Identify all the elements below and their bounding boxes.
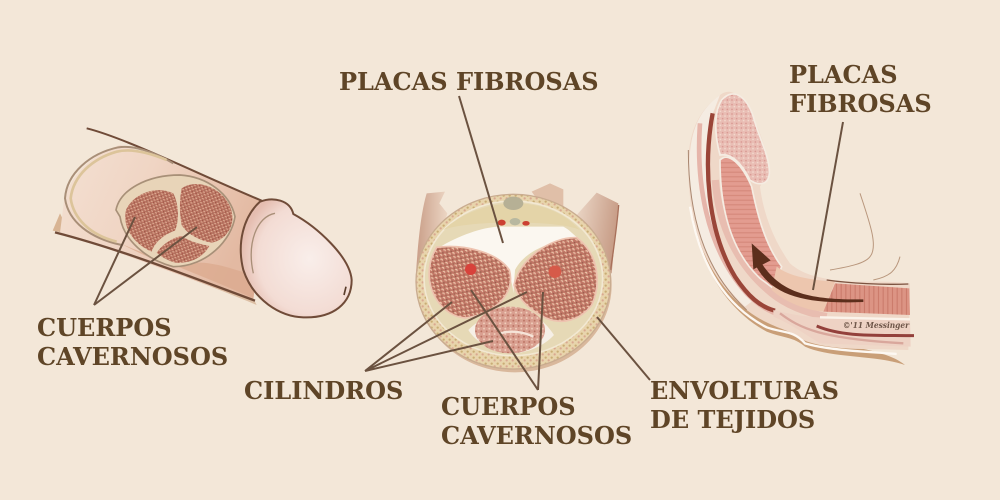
label: placas fibrosas right: PLACAS bbox=[789, 60, 898, 89]
left side tissue bbox=[416, 192, 447, 273]
arrow head bbox=[752, 243, 771, 269]
cross section sheath bbox=[116, 175, 235, 267]
dark outer contour bbox=[688, 150, 747, 310]
label: cuerpos cavernosos center: CAVERNOSOS bbox=[441, 421, 632, 450]
bottom tan shadow bbox=[692, 213, 905, 365]
label: placas fibrosas center: PLACAS FIBROSAS bbox=[339, 67, 599, 96]
red vessel right bbox=[522, 221, 530, 226]
lower red band bbox=[817, 326, 914, 336]
base muscle bbox=[823, 283, 910, 315]
pink top of wrap bbox=[443, 203, 580, 230]
lower white space bbox=[468, 307, 554, 353]
glans section bbox=[716, 94, 769, 184]
bottom shadow bbox=[418, 198, 612, 372]
opening bbox=[344, 287, 346, 295]
fibrous plaque bbox=[772, 267, 835, 312]
label: placas fibrosas right bbox=[789, 60, 932, 118]
label: cuerpos cavernosos left: CUERPOS bbox=[37, 313, 172, 342]
outer pale skin bbox=[689, 95, 752, 307]
stripe in lower layer bbox=[780, 313, 903, 343]
left cylinder bbox=[125, 190, 178, 252]
illustration: side view with cross section bbox=[53, 128, 352, 317]
right artery bbox=[549, 265, 561, 278]
glans highlight bbox=[251, 213, 275, 273]
second layer bbox=[715, 180, 827, 317]
label: cuerpos cavernosos center: CUERPOS bbox=[441, 392, 576, 421]
label: cilindros: CILINDROS bbox=[244, 376, 403, 405]
lower body bbox=[475, 307, 545, 353]
illustration: lengthwise section bbox=[688, 92, 914, 365]
outer body bbox=[688, 92, 910, 350]
leader lines: cilindros bbox=[365, 292, 527, 371]
right side tissue bbox=[577, 193, 618, 273]
label: envolturas de tejidos bbox=[650, 376, 839, 434]
leader line: placas fibrosas right bbox=[813, 122, 843, 290]
inner wrap ring bbox=[424, 201, 603, 356]
leader lines: left cuerpos cavernosos bbox=[94, 217, 197, 305]
lower skin line bbox=[55, 232, 255, 301]
cut edge of skin bbox=[65, 147, 173, 245]
left artery bbox=[465, 264, 476, 275]
left cylinder bbox=[429, 247, 511, 318]
right tissue line bbox=[611, 205, 619, 270]
bottom body bbox=[157, 236, 209, 263]
arrow bbox=[756, 262, 863, 302]
red vessel left bbox=[498, 220, 506, 226]
leader lines: center cuerpos cavernosos bbox=[471, 290, 543, 390]
label: envolturas de tejidos: ENVOLTURAS bbox=[650, 376, 839, 405]
ground shadow under shaft bbox=[53, 213, 70, 234]
top edge bbox=[827, 280, 908, 284]
glans bbox=[241, 199, 352, 317]
label: cuerpos cavernosos center bbox=[441, 392, 632, 450]
vessel mid bbox=[510, 218, 520, 225]
label: cuerpos cavernosos left: CAVERNOSOS bbox=[37, 342, 228, 371]
right cylinder bbox=[180, 184, 232, 243]
corpus section bbox=[720, 157, 782, 288]
signature: ©'11 Messinger bbox=[843, 320, 910, 330]
outer wrap bbox=[416, 194, 611, 369]
mottled skin layer bbox=[699, 123, 780, 315]
leader line: envolturas bbox=[597, 317, 650, 380]
lower white band bbox=[820, 317, 910, 319]
top vessels bbox=[503, 197, 523, 210]
illustration: cross section bbox=[416, 183, 619, 372]
upper skin line bbox=[87, 128, 262, 201]
lower shaft shading bbox=[120, 243, 257, 298]
top tissue bbox=[532, 183, 563, 207]
dark tissue band bbox=[708, 113, 775, 311]
label: envolturas de tejidos: DE TEJIDOS bbox=[650, 405, 815, 434]
fat layer in cut edge bbox=[71, 150, 167, 242]
urethra bbox=[500, 332, 533, 337]
leader line: placas fibrosas center bbox=[459, 96, 503, 243]
right cylinder bbox=[514, 238, 597, 321]
lower layer bbox=[773, 310, 911, 347]
label: cuerpos cavernosos left bbox=[37, 313, 228, 371]
white skin line bbox=[690, 207, 897, 354]
shadow below shaft bbox=[123, 248, 257, 305]
shaft bbox=[60, 145, 262, 301]
white plaque bbox=[442, 227, 578, 293]
belly contour bbox=[830, 193, 900, 280]
label: placas fibrosas right: FIBROSAS bbox=[789, 89, 932, 118]
